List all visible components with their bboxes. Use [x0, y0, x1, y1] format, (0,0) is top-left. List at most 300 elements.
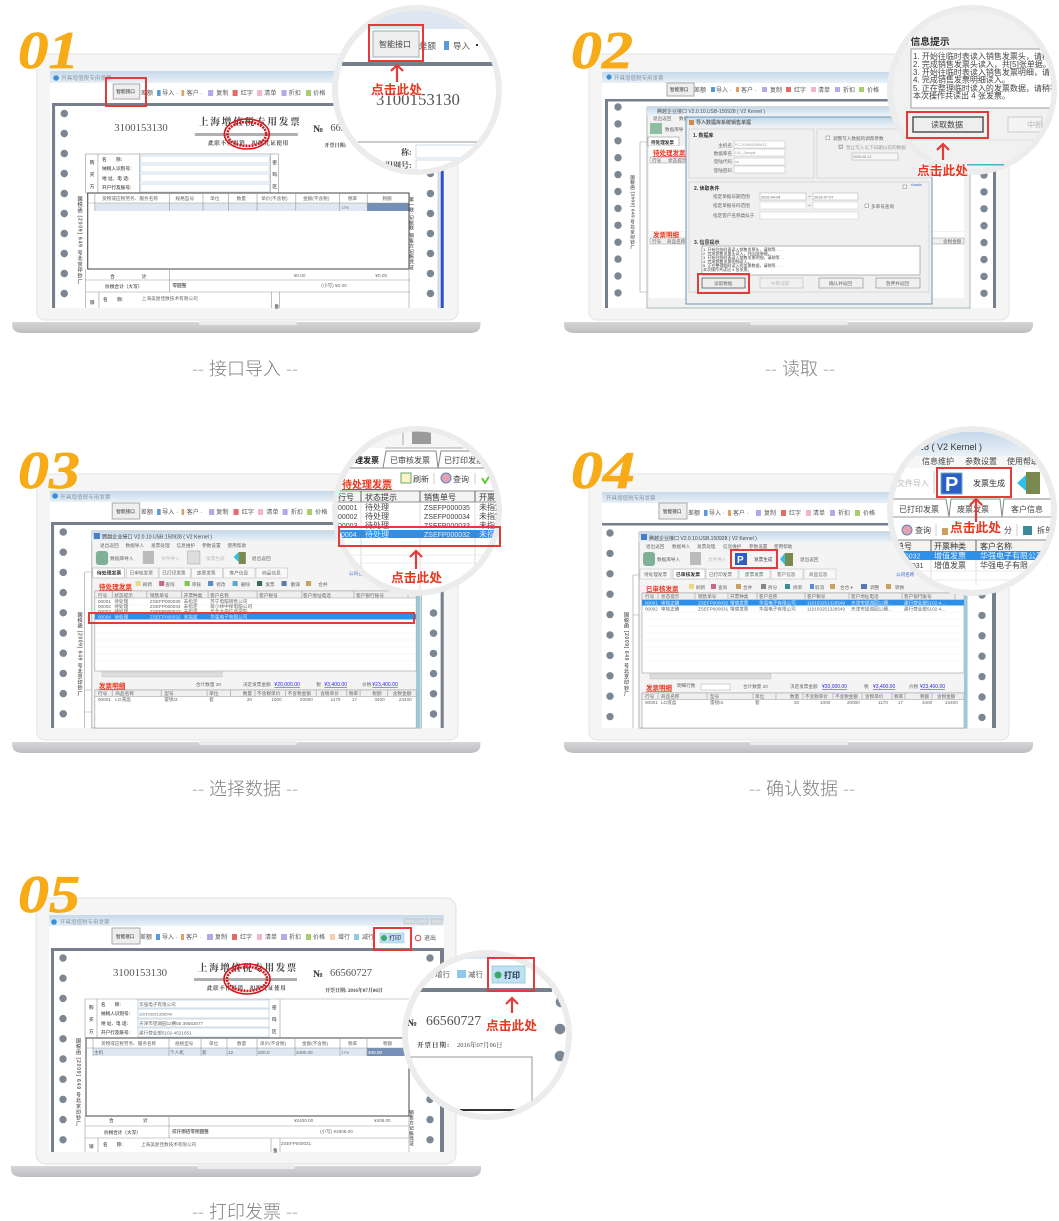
magnifier: generate invoice button: 分 [1004, 526, 1012, 535]
screen: reviewed invoice list: 价格 [863, 509, 875, 517]
screen: import dialog: 待处理发票 [651, 139, 674, 146]
screen: import dialog: 指定单据号码范围 [713, 202, 750, 209]
screen: filled invoice: 天津市望湖园12赛55 36562677 [139, 1020, 204, 1027]
screen: invoice form: 地 址、电 话: [102, 175, 130, 182]
magnifier: print button: 打印 [504, 970, 520, 980]
highlight box in magnifier [488, 958, 534, 991]
screen: filled invoice: 退出 [424, 934, 436, 942]
screen: pending invoice list: 税率 [349, 690, 359, 697]
screen: reviewed invoice list: 复制 [764, 509, 776, 517]
screen: import dialog: 2016-04-04 [761, 196, 780, 200]
laptop frame [564, 474, 1033, 753]
arrow [937, 144, 949, 160]
screen: pending invoice list: 客户名称 [210, 592, 229, 599]
screen: reviewed invoice list [602, 492, 996, 728]
screen: pending invoice list: 销售单号 [150, 592, 169, 599]
magnifier: smart interface button: 导入 [453, 41, 471, 51]
magnifier: read data button: 本次操作共读出 4 张发票。 [913, 90, 1010, 100]
screen: reviewed invoice list: 00001 [645, 600, 658, 606]
screen: pending invoice list: 已审核发票 [130, 570, 153, 576]
screen: reviewed invoice list: 合并 [743, 584, 753, 591]
magnifier: generate invoice button: 单号 [896, 541, 912, 551]
screen: pending invoice list: ¥23,400.00 [372, 682, 398, 688]
screen: import dialog: 2. 完成销售发票头读入，共[5]张单据。 [703, 250, 772, 256]
screen: invoice form: 红字 [241, 89, 253, 97]
screen: invoice form: 计 [142, 273, 147, 280]
screen: filled invoice: 上海增值税专用发票 [198, 962, 298, 974]
screen: filled invoice: 合 [109, 1117, 114, 1124]
magnifier: selected row: 已打印发票 [444, 455, 484, 465]
screen: reviewed invoice list: 3400 [922, 700, 933, 705]
screen: pending invoice list: 数量 [243, 690, 252, 697]
screen: pending invoice list: 客户税号 [259, 592, 278, 599]
screen: pending invoice list: 价格 [315, 508, 327, 516]
screen: pending invoice list: 待处理发票 [99, 582, 132, 591]
screen: reviewed invoice list: 状态提示 [661, 593, 680, 600]
screen: pending invoice list: 复制 [216, 508, 228, 516]
screen: pending invoice list: 套 [209, 696, 214, 703]
magnifier: generate invoice button: 废票发票 [957, 504, 989, 514]
screen: pending invoice list: 待处理 [114, 598, 129, 605]
screen: reviewed invoice list: 明细行数 [677, 682, 696, 689]
screen: reviewed invoice list: 含税单价 [865, 693, 884, 700]
screen: filled invoice [49, 915, 444, 1154]
screen: reviewed invoice list: 1170 [878, 700, 888, 705]
screen: reviewed invoice list: 已审核发票 [676, 571, 700, 578]
magnifier: read data button [890, 8, 1059, 178]
screen: import dialog: 指定客户名称类似于 [713, 212, 755, 219]
screen: reviewed invoice list: ZSEFP000032 [698, 600, 729, 606]
magnifier: generate invoice button: 28 ( V2 Kernel ) [919, 442, 982, 452]
screen: pending invoice list: 雷锐I3 [164, 696, 178, 703]
screen: invoice form: 名 称: [102, 156, 123, 163]
screen: reviewed invoice list: 商品信息 [809, 571, 828, 578]
magnifier: selected row: 00003 [338, 523, 358, 530]
screen: filled invoice: 减行 [362, 933, 374, 941]
screen: invoice form: 单位 [210, 195, 220, 202]
screen: filled invoice: 打印 [389, 934, 401, 942]
screen: import dialog: 商品名称 [667, 238, 686, 245]
screen: filled invoice: 200.0 [258, 1050, 270, 1055]
screen: reviewed invoice list: 腾越企业接口 V2.0.10.USB.150928 ( V2 Kernel ) [649, 535, 757, 542]
screen: reviewed invoice list: 数据导入 [672, 543, 691, 550]
screen: reviewed invoice list: 客户名称 [759, 593, 778, 600]
screen: pending invoice list: 智能接口 [116, 508, 135, 515]
screen: pending invoice list: 数据导入 [125, 542, 145, 549]
screen: reviewed invoice list: 销售单号 [698, 593, 717, 600]
screen: reviewed invoice list: 开具增值税专用发票 [606, 494, 656, 502]
magnifier: print button: 开票日期: [417, 1040, 450, 1049]
arrow [391, 65, 403, 82]
screen: pending invoice list: 苏宁电脑销售公司 [210, 598, 248, 605]
screen: pending invoice list: 红字 [242, 508, 254, 516]
screen: pending invoice list: 00004 [98, 615, 111, 619]
screen: filled invoice: 名 称: [103, 1141, 123, 1148]
screen: reviewed invoice list: 20000 [847, 700, 860, 705]
screen: invoice form: 密 [272, 159, 277, 166]
screen: pending invoice list: 信息维护 [176, 542, 196, 549]
screen: filled invoice: 差额 [140, 933, 152, 941]
caption: interface import: -- 接口导入 -- [192, 359, 298, 379]
screen: import dialog: 2. 读取条件 [694, 185, 720, 192]
screen: reviewed invoice list: 型号 [710, 693, 720, 700]
magnifier: smart interface button: 智能接口 [379, 39, 411, 49]
screen: filled invoice: 红字 [240, 933, 252, 941]
magnifier: read data button: 1. 开始往临时表读入销售发票头，请稍等 [913, 51, 1058, 61]
screen: reviewed invoice list: 套 [755, 699, 760, 706]
magnifier: read data button: 中断 [1027, 120, 1043, 130]
screen: import dialog: 数据 [679, 115, 689, 122]
screen: pending invoice list: 1000 [271, 697, 282, 702]
screen: import dialog: 4. 完成销售发票明细读入。 [703, 258, 751, 264]
screen: pending invoice list: 客户地址电话 [303, 592, 331, 599]
magnifier: selected row: 未指定 [479, 529, 503, 539]
highlight box: generate invoice button [731, 550, 777, 568]
screen: reviewed invoice list: 客户 · [733, 509, 749, 517]
screen: pending invoice list: ZSEFP000032 [150, 615, 181, 619]
screen: invoice form: 销 [90, 299, 95, 306]
screen: pending invoice list: 审核 [192, 581, 201, 588]
screen: pending invoice list: 已打印发票 [162, 570, 186, 576]
screen: reviewed invoice list: 文件导入 [708, 556, 727, 563]
magnifier: generate invoice button: 查询 [915, 525, 931, 535]
screen: invoice form: 货物或应税劳务、服务名称 [102, 195, 158, 202]
screen: pending invoice list: ZSEFP000035 [150, 599, 181, 604]
screen: reviewed invoice list: 退出返回 [646, 543, 665, 550]
screen: reviewed invoice list: ¥20,000.00 [822, 684, 847, 690]
magnifier: selected row: ZSEFP000032 [424, 532, 470, 539]
screen: filled invoice: 价税合计（大写） [104, 1129, 141, 1136]
screen: filled invoice: 此联不作报销、扣税凭证使用 [207, 984, 286, 992]
screen: invoice form: 价格 [313, 89, 325, 97]
screen: import dialog [602, 72, 996, 308]
screen: pending invoice list: 合计数量 20 [196, 681, 221, 688]
screen: pending invoice list: 20 [247, 697, 252, 702]
screen: reviewed invoice list: 增值发票 [730, 600, 749, 606]
magnifier: selected row [335, 428, 505, 593]
magnifier: print button: 联 销售方记账 [409, 1089, 414, 1120]
screen: reviewed invoice list: 110103251328549 [807, 606, 845, 612]
screen: pending invoice list: 商品信息 [262, 570, 281, 576]
screen: import dialog: 3. 信息提示 [694, 239, 720, 246]
screen: pending invoice list: 参数设置 [202, 542, 221, 549]
screen: import dialog: U11_Sample [735, 151, 756, 155]
magnifier: generate invoice button: 0031 [908, 563, 924, 570]
screen: reviewed invoice list: 20 [794, 700, 800, 705]
magnifier: generate invoice button: 参数设置 [965, 456, 997, 466]
screen: import dialog: 多单号查询 [871, 203, 894, 210]
screen: reviewed invoice list: 审核正确 [661, 600, 680, 606]
screen: reviewed invoice list: 合合 ▾ [840, 584, 853, 591]
screen: pending invoice list: 修改 [216, 581, 226, 588]
screen: invoice form: 区 [272, 184, 277, 189]
laptop frame [12, 54, 480, 333]
teal dialog edge [967, 164, 1004, 166]
screen: invoice form: 金额(不含税) [303, 195, 330, 202]
magnifier: selected row: 理发票 [355, 455, 379, 465]
screen: invoice form: 备 [274, 303, 279, 310]
screen: import dialog: 读取数据 [714, 280, 733, 287]
screen: reviewed invoice list: 客户税号 [807, 593, 826, 600]
screen: reviewed invoice list: 税率 [894, 693, 904, 700]
screen: pending invoice list: ¥3,400.00 [324, 682, 347, 688]
screen: reviewed invoice list: 发票明细 [646, 683, 672, 692]
screen: import dialog: 确认并返回 [829, 280, 852, 287]
screen: filled invoice: 上海美屋佳数技术有限公司 [141, 1141, 197, 1148]
screen: reviewed invoice list: 华强电子有限公司 [759, 606, 796, 612]
highlight box: selected row [89, 613, 414, 623]
screen: reviewed invoice list: 天津市望湖园12赛... [851, 600, 892, 606]
magnifier: selected row: ZSEFP000033 [424, 523, 470, 530]
screen: invoice form: 清单 [264, 89, 276, 97]
screen: pending invoice list: 待处理发票 [97, 570, 121, 576]
screen: reviewed invoice list: 客户信息 [777, 571, 796, 578]
screen: invoice form: 17% [342, 206, 349, 210]
screen: reviewed invoice list: 建行营业部5102-4... [904, 606, 945, 612]
laptop frame [564, 54, 1033, 333]
screen: import dialog: PC-201605259W12 [735, 143, 767, 147]
screen: filled invoice: 清单 [265, 933, 277, 941]
laptop frame [12, 474, 480, 753]
screen: filled invoice: 主机 [94, 1049, 104, 1056]
magnifier: read data button: 5. 正在整理临时读入的发票数据，请稍等 [913, 83, 1058, 93]
screen: filled invoice: 开具增值税专用发票 [60, 918, 110, 926]
screen: filled invoice: (小写) ¥2808.00 [320, 1128, 353, 1135]
screen: reviewed invoice list: 合计数量 20 [743, 683, 768, 690]
screen: import dialog: 中断读取 [771, 280, 790, 287]
screen: invoice form [50, 71, 444, 310]
screen: invoice form: 折扣 [289, 89, 301, 97]
screen: reviewed invoice list: 智能接口 [663, 508, 682, 515]
arrow [410, 551, 422, 569]
panel: step 05 print invoice [11, 898, 570, 1177]
magnifier: selected row: ZSEFP000034 [424, 514, 470, 521]
screen: filled invoice: 建行营业部5102-4521651 [139, 1030, 192, 1036]
screen: invoice form: 开户行及账号: [102, 184, 132, 191]
screen: invoice form: 数量 [237, 195, 246, 202]
callout: click here: 点击此处 [917, 163, 968, 178]
magnifier: selected row: 00002 [338, 514, 358, 521]
screen: pending invoice list: 合并 [318, 581, 328, 588]
magnifier: read data button: 4. 完成销售发票明细读入。 [913, 74, 1010, 84]
screen: pending invoice list: 清单 [266, 508, 278, 516]
screen: pending invoice list: 折扣 [291, 508, 303, 516]
step number 01: 01 [18, 22, 79, 80]
screen: invoice form: 开具增值税专用发票 [61, 74, 112, 82]
screen: filled invoice: 66560727 [330, 968, 372, 979]
magnifier: selected row: 0004 [341, 532, 357, 539]
arrow [970, 499, 982, 522]
magnifier: read data button: . 信息提示 [905, 35, 950, 48]
screen: filled invoice: 贰仟捌佰零捌圆整 [172, 1128, 209, 1135]
screen: filled invoice: 12 [228, 1050, 234, 1055]
screen: reviewed invoice list: 单位 [755, 693, 765, 700]
screen: reviewed invoice list: 国税函 [2009] 649 号北京印钞厂 [623, 611, 629, 697]
screen: reviewed invoice list: 清单 [813, 509, 825, 517]
screen: pending invoice list: 客户信息 [229, 570, 249, 576]
step number 03: 03 [18, 442, 80, 500]
screen: reviewed invoice list: 发票处理 [697, 543, 716, 550]
highlight box in magnifier [907, 112, 988, 138]
screen: pending invoice list: 行号 [98, 690, 108, 697]
screen: import dialog: 数据库导 [665, 126, 684, 133]
magnifier: smart interface button: 差额 [419, 41, 437, 51]
screen: import dialog: 智能接口 [670, 86, 689, 93]
screen: invoice form: 买 [90, 171, 95, 178]
screen: filled invoice: 导入 · [162, 934, 178, 941]
screen: invoice form: 码 [272, 171, 277, 178]
screen: invoice form: 单价(不含税) [261, 195, 288, 202]
magnifier: print button: 减行 [468, 969, 483, 979]
screen: pending invoice list: 行号 [98, 592, 108, 599]
screen: import dialog: 清单 [818, 86, 830, 94]
screen: import dialog: 主机名 [718, 142, 732, 149]
screen: pending invoice list: 税 [316, 681, 321, 688]
screen: reviewed invoice list: 税额 [920, 693, 930, 700]
screen: filled invoice: ¥2400.00 [294, 1118, 314, 1123]
screen: pending invoice list: 00003 [98, 609, 111, 614]
screen: reviewed invoice list: 1000 [820, 700, 831, 705]
step number 05: 05 [18, 866, 80, 924]
screen: filled invoice: 折扣 [289, 933, 301, 941]
screen: filled invoice: 单价(不含税) [260, 1040, 286, 1047]
screen: invoice form: 复制 [216, 89, 228, 97]
screen: reviewed invoice list: 待处理发票 [644, 571, 667, 578]
screen: reviewed invoice list: 价税 [909, 683, 919, 690]
caption: read: -- 读取 -- [765, 359, 835, 379]
screen: pending invoice list: 1170 [330, 697, 341, 702]
screen: pending invoice list: ZSEFP000034 [150, 604, 181, 609]
screen: import dialog: 折扣 [843, 86, 855, 94]
screen: filled invoice: 计 [143, 1117, 148, 1124]
screen: reviewed invoice list: 差额 [688, 509, 700, 517]
screen: pending invoice list: 待处理 [114, 614, 129, 620]
panel: step 02 read [564, 8, 1059, 333]
screen: reviewed invoice list: 查询 [718, 584, 728, 591]
screen: invoice form: 上海美屋佳数技术有限公司 [142, 295, 198, 302]
screen: filled invoice: 买 [89, 1016, 94, 1023]
screen: pending invoice list: 00001 [98, 599, 111, 604]
screen: reviewed invoice list: 17 [898, 700, 904, 705]
screen: invoice form: 客户 · [187, 89, 203, 97]
screen: filled invoice: 纳税人识别号: [101, 1010, 131, 1017]
screen: filled invoice: 3100153130 [113, 967, 167, 979]
screen: reviewed invoice list: 拆分 [768, 584, 778, 591]
screen: pending invoice list: ZSEFP000033 [150, 609, 181, 614]
screen: reviewed invoice list: 拆单 [793, 584, 803, 591]
magnifier: generate invoice button: 华强电子有限公司 [980, 550, 1044, 560]
magnifier: print button: 2016年07月06日 [457, 1040, 502, 1049]
magnifier: selected row: 销售单号 [424, 492, 456, 502]
screen: pending invoice list: 17 [352, 697, 358, 702]
screen: filled invoice: 2400.00 [296, 1050, 313, 1055]
screen: pending invoice list: 公司名 [349, 570, 363, 577]
screen: reviewed invoice list: 客户地址电话 [851, 593, 879, 600]
screen: filled invoice: 110103251328549 [139, 1012, 173, 1016]
screen: reviewed invoice list: 含税金额 [937, 693, 956, 700]
screen: reviewed invoice list: 23400 [945, 700, 958, 705]
screen: invoice form: 国税函 [2009] 649 号北京印钞厂 [77, 195, 83, 285]
screen: import dialog: 本次操作共读出 4 张发票。 [703, 266, 751, 272]
screen: pending invoice list: 价税 [362, 681, 372, 688]
callout: click here: 点击此处 [950, 520, 1001, 535]
magnifier: print button: 66560727 [426, 1013, 481, 1028]
screen: reviewed invoice list: 发票生成 [754, 556, 773, 563]
screen: invoice form: 零圆整 [172, 282, 187, 289]
magnifier: selected row: 刷新 [413, 474, 429, 484]
screen: pending invoice list: LG液晶 [115, 696, 131, 703]
screen: filled invoice: 单位 [209, 1040, 219, 1047]
screen: invoice form: 第一联:记账联 销售方记账凭证 [409, 196, 415, 271]
screen: import dialog: 调整写入数据的调帮参数 [833, 135, 884, 142]
screen: reviewed invoice list: ¥23,400.00 [920, 684, 945, 690]
screen: filled invoice: 规格型号 [175, 1040, 194, 1047]
screen: filled invoice: 税额 [383, 1040, 393, 1047]
screen: pending invoice list: 差额 [141, 508, 153, 516]
screen: pending invoice list: 23400 [399, 697, 412, 702]
screen: reviewed invoice list: ZSEFP000031 [698, 606, 729, 612]
magnifier: selected row: 行号 [338, 492, 354, 502]
screen: filled invoice: 408.00 [368, 1050, 382, 1055]
screen: import dialog: 导入 · [716, 87, 732, 94]
screen: pending invoice list: 客户 · [187, 508, 203, 516]
screen: import dialog: 行号 [652, 238, 662, 245]
screen: reviewed invoice list: ¥3,400.00 [873, 684, 895, 690]
screen: filled invoice: 智能接口 [116, 933, 135, 940]
screen: pending invoice list: 未指定 [184, 603, 198, 610]
screen: filled invoice: 密 [272, 1004, 277, 1011]
screen: reviewed invoice list: 退出返回 [800, 556, 819, 563]
screen: filled invoice: ¥408.00 [374, 1118, 391, 1123]
highlight box in magnifier [369, 25, 423, 61]
screen: invoice form: ¥0.00 [375, 273, 387, 278]
screen: pending invoice list: 导入 · [162, 509, 178, 516]
screen: reviewed invoice list: 商品名称 [661, 693, 680, 700]
screen: pending invoice list: 蒋小林中保电脑公司 [210, 603, 253, 610]
screen: pending invoice list: 3400 [374, 697, 385, 702]
screen: invoice form: 方 [90, 183, 95, 190]
screen: pending invoice list: 未指定 [184, 608, 198, 615]
screen: reviewed invoice list: 折扣 [838, 509, 850, 517]
step number 02: 02 [571, 22, 633, 80]
screen: filled invoice: 增行 [338, 933, 350, 941]
screen: pending invoice list: 税额 [372, 690, 382, 697]
screen: filled invoice: 码 [272, 1016, 277, 1023]
screen: pending invoice list: 华强电子有限公司 [210, 614, 248, 620]
screen: pending invoice list: 发票 [265, 581, 275, 588]
magnifier: generate invoice button: 客户名称 [980, 541, 1012, 551]
screen: pending invoice list: 决定发票金额 [243, 681, 271, 688]
screen: pending invoice list: 含税金额 [393, 690, 412, 697]
screen: invoice form: 差额 [141, 89, 153, 97]
screen: invoice form: 此联不作报销、扣税凭证使用 [208, 139, 289, 147]
screen: reviewed invoice list: 取消 [815, 584, 825, 591]
screen: reviewed invoice list: 华强电子有限公司 [759, 600, 796, 606]
screen: invoice form: 税额 [383, 195, 392, 202]
screen: filled invoice: 个人机 [170, 1049, 184, 1056]
screen: pending invoice list: 发票明细 [99, 681, 126, 690]
screen: import dialog: 指定单据日期范围 [713, 193, 750, 200]
screen: reviewed invoice list: 税 [864, 683, 869, 690]
screen: invoice form: 智能接口 [116, 88, 135, 95]
screen: reviewed invoice list: 使用帮助 [774, 543, 793, 550]
screen: reviewed invoice list: 不含税单价 [805, 693, 828, 700]
screen: pending invoice list: ¥20,000.00 [274, 682, 300, 688]
magnifier: selected row: 待处理 [365, 502, 389, 512]
screen: pending invoice list: 开具增值税专用发票 [60, 493, 111, 501]
screen: filled invoice: 销售方记账凭证 [409, 1109, 414, 1147]
magnifier: selected row: 未指定 [479, 511, 503, 521]
